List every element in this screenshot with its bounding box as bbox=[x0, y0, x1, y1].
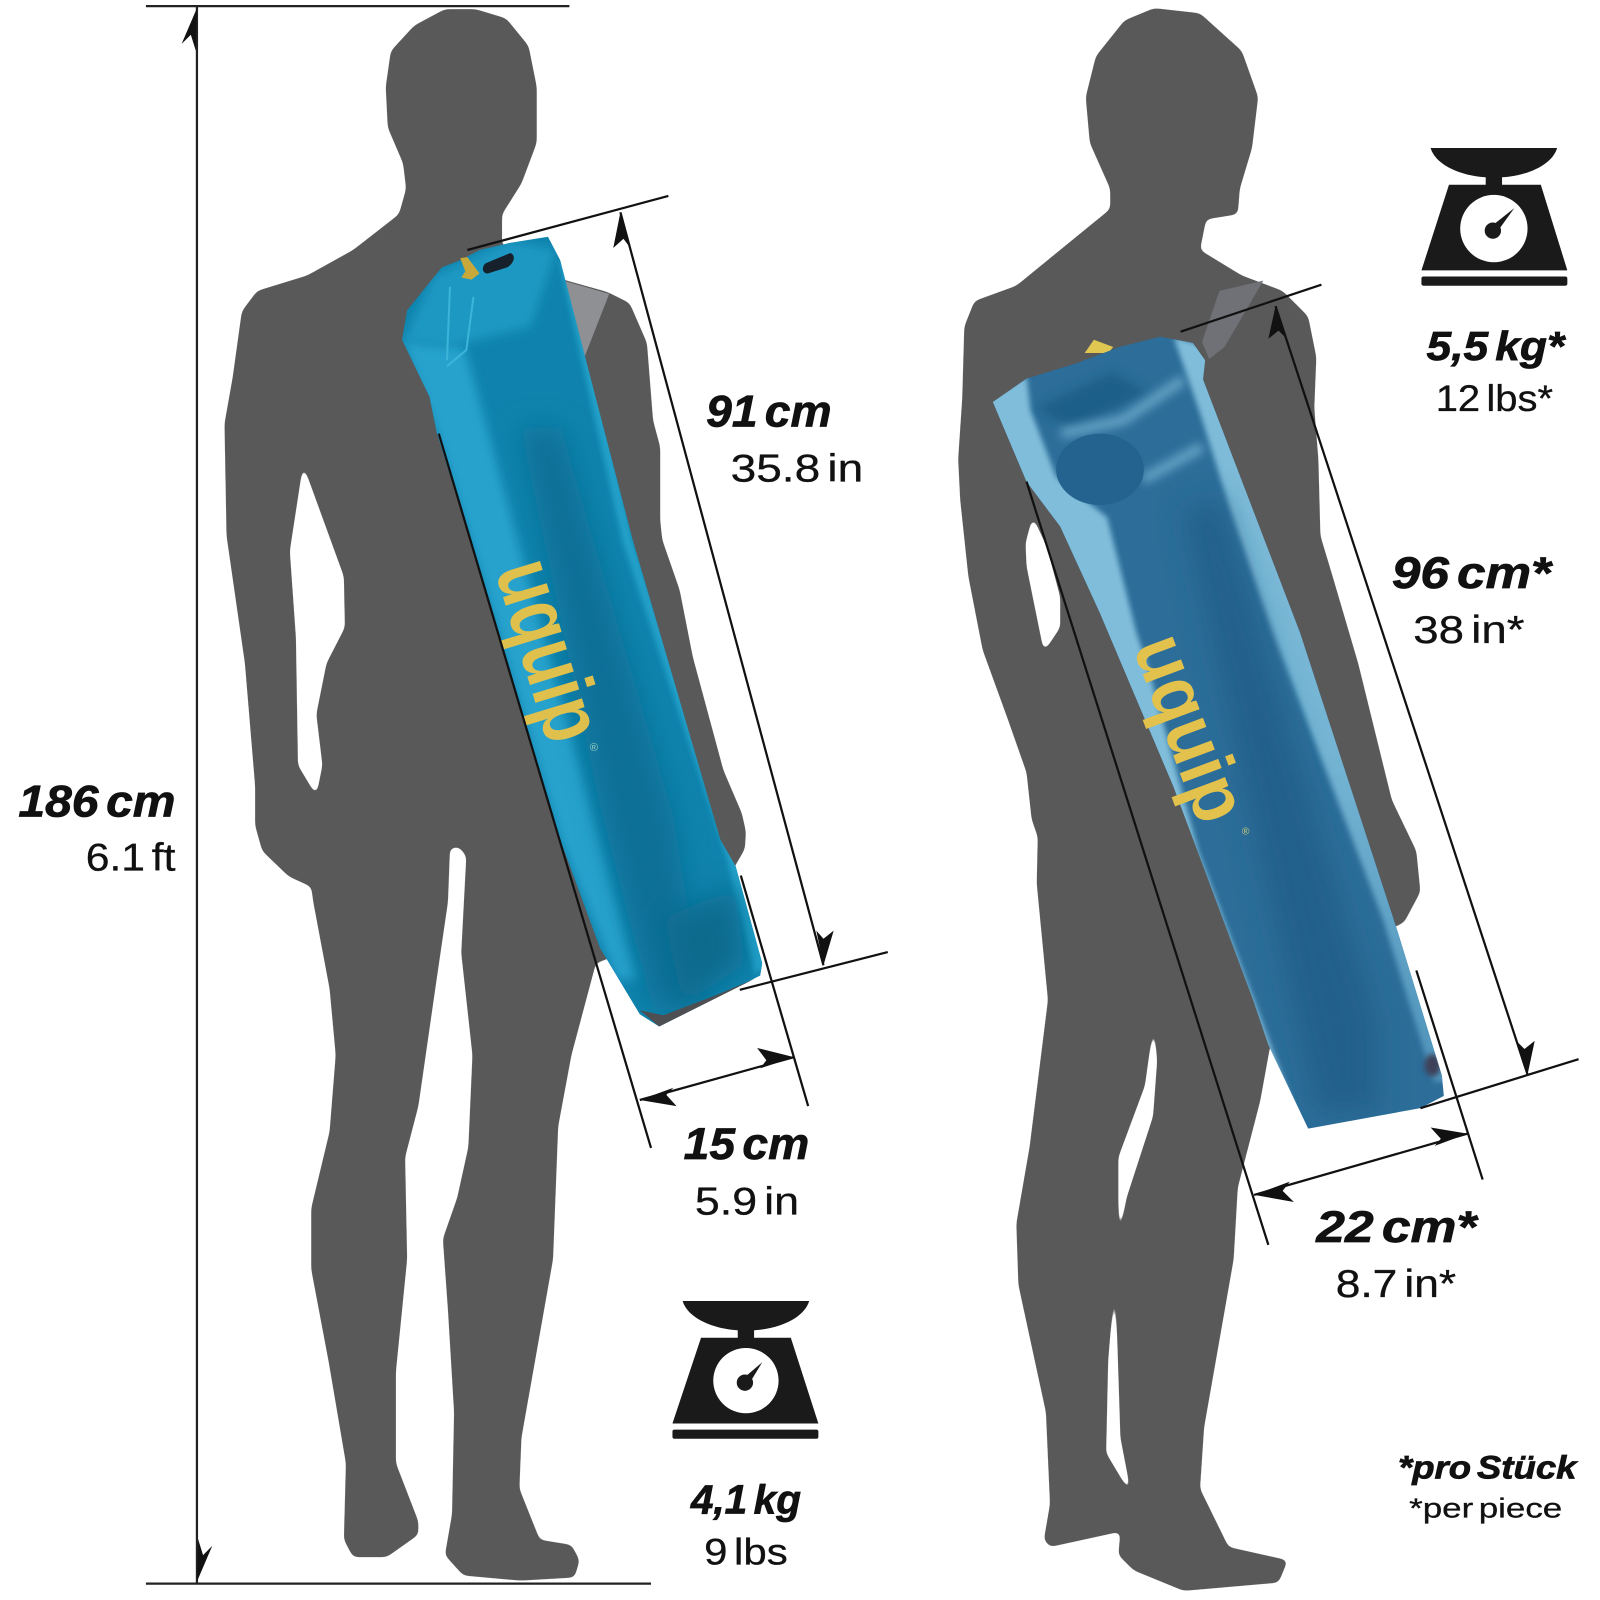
text: 15 cm: 15 cm bbox=[684, 1118, 809, 1169]
bag: right blue carry bag bbox=[980, 327, 1459, 1143]
text: 9 lbs: 9 lbs bbox=[704, 1531, 788, 1572]
icon: kitchen scale right bbox=[1421, 148, 1567, 286]
logo: uquip: ® bbox=[1242, 827, 1250, 838]
bag: left teal carry bag bbox=[402, 236, 762, 1026]
dimension: bag diameter 15 cm bbox=[439, 434, 808, 1148]
text: 186 cm: 186 cm bbox=[18, 775, 176, 826]
dimension: bag length 96 cm bbox=[1181, 285, 1579, 1108]
text: 8.7 in*: 8.7 in* bbox=[1336, 1263, 1456, 1306]
text: per piece note: *per piece bbox=[1409, 1492, 1562, 1523]
logo: uquip: uquip bbox=[1117, 623, 1265, 834]
icon: kitchen scale left bbox=[672, 1301, 818, 1439]
text: 5.9 in: 5.9 in bbox=[695, 1180, 799, 1223]
strap: left bag bbox=[563, 281, 609, 359]
text: pro Stück note: *pro Stück bbox=[1398, 1449, 1579, 1486]
figure: right silhouette bbox=[958, 8, 1420, 1591]
dark inner shape bbox=[1056, 434, 1144, 505]
logo: uquip bbox=[498, 561, 598, 751]
text: 38 in*: 38 in* bbox=[1413, 609, 1524, 652]
strap: right bag bbox=[1202, 281, 1263, 359]
text: 6.1 ft: 6.1 ft bbox=[86, 836, 176, 879]
toggle bbox=[460, 257, 480, 280]
text: 35.8 in: 35.8 in bbox=[731, 448, 863, 491]
dimension: body height 186 cm bbox=[146, 6, 651, 1584]
logo: uquip: uquip bbox=[477, 548, 623, 753]
text: 91 cm: 91 cm bbox=[706, 386, 832, 437]
text: 22 cm*: 22 cm* bbox=[1315, 1201, 1479, 1252]
figure: left silhouette bbox=[224, 9, 746, 1581]
bag bottom shadow bbox=[640, 979, 755, 1027]
text: 5,5 kg*: 5,5 kg* bbox=[1427, 323, 1567, 369]
drawstring opening bbox=[483, 253, 514, 273]
dimension: bag diameter 22 cm bbox=[1027, 482, 1483, 1245]
text: 4,1 kg: 4,1 kg bbox=[690, 1476, 801, 1522]
dimension: bag length 91 cm bbox=[467, 196, 888, 990]
logo: uquip: ® bbox=[590, 742, 599, 754]
wear spot bbox=[1424, 1054, 1441, 1077]
text: 96 cm*: 96 cm* bbox=[1392, 547, 1554, 598]
text: 12 lbs*: 12 lbs* bbox=[1436, 378, 1553, 419]
